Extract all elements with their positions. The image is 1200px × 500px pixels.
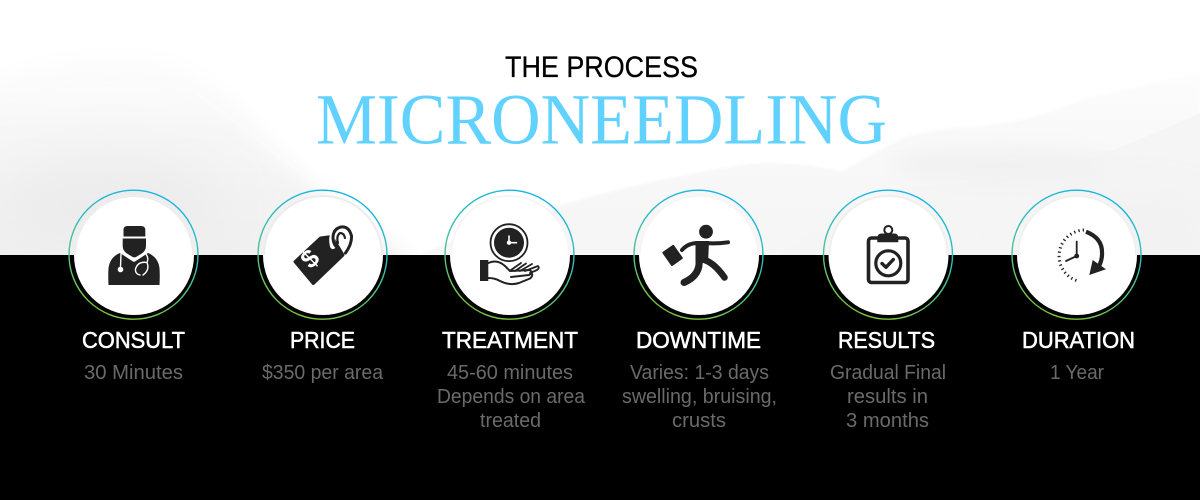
text: treatment detail: treated bbox=[480, 410, 541, 432]
title: microneedling: MICRONEEDLING bbox=[316, 80, 887, 160]
label: duration: DURATION bbox=[1022, 327, 1135, 353]
text: duration detail: 1 Year bbox=[1050, 362, 1104, 384]
text: downtime detail: crusts bbox=[672, 410, 726, 432]
text: results detail: 3 months bbox=[846, 410, 929, 432]
label: price: PRICE bbox=[290, 327, 355, 353]
icon: clock over hand bbox=[480, 224, 539, 284]
label: consult: CONSULT bbox=[82, 327, 185, 353]
badge: downtime circle bbox=[634, 190, 763, 319]
text: results detail: results in bbox=[847, 386, 928, 408]
text: downtime detail: Varies: 1-3 days bbox=[630, 362, 769, 384]
text: price detail: $350 per area bbox=[262, 362, 384, 384]
text: downtime detail bbox=[622, 362, 777, 432]
text: treatment detail bbox=[437, 362, 586, 432]
text: results detail bbox=[830, 362, 946, 432]
text: treatment detail: Depends on area bbox=[437, 386, 586, 408]
panel: results bbox=[824, 190, 952, 432]
text: consult detail: 30 Minutes bbox=[84, 362, 183, 384]
icon: price tag: $ bbox=[294, 242, 326, 274]
icon: clock with arrow bbox=[1059, 230, 1106, 281]
badge: consult circle bbox=[69, 190, 198, 319]
label: treatment: TREATMENT bbox=[442, 327, 578, 353]
label: downtime: DOWNTIME bbox=[636, 327, 761, 353]
panel: downtime bbox=[622, 190, 777, 432]
badge: price circle bbox=[258, 190, 387, 319]
icon: clipboard with check bbox=[868, 226, 908, 282]
badge: treatment circle bbox=[445, 190, 574, 319]
text: downtime detail: swelling, bruising, bbox=[622, 386, 777, 408]
icon: price tag bbox=[294, 227, 352, 284]
badge: duration circle bbox=[1012, 190, 1141, 319]
panel: treatment bbox=[437, 190, 586, 432]
text: results detail: Gradual Final bbox=[830, 362, 946, 384]
panel: duration bbox=[1012, 190, 1141, 384]
icon: running businessman bbox=[662, 225, 728, 282]
icon: doctor bbox=[108, 226, 160, 285]
panel: price bbox=[258, 190, 387, 384]
badge: results circle bbox=[824, 190, 952, 319]
text: treatment detail: 45-60 minutes bbox=[447, 362, 573, 384]
panel: consult bbox=[69, 190, 198, 384]
label: results: RESULTS bbox=[838, 327, 935, 353]
background: white silk waves bbox=[0, 114, 1200, 255]
heading: the process: THE PROCESS bbox=[505, 51, 698, 84]
black lower panel bbox=[0, 255, 1200, 500]
